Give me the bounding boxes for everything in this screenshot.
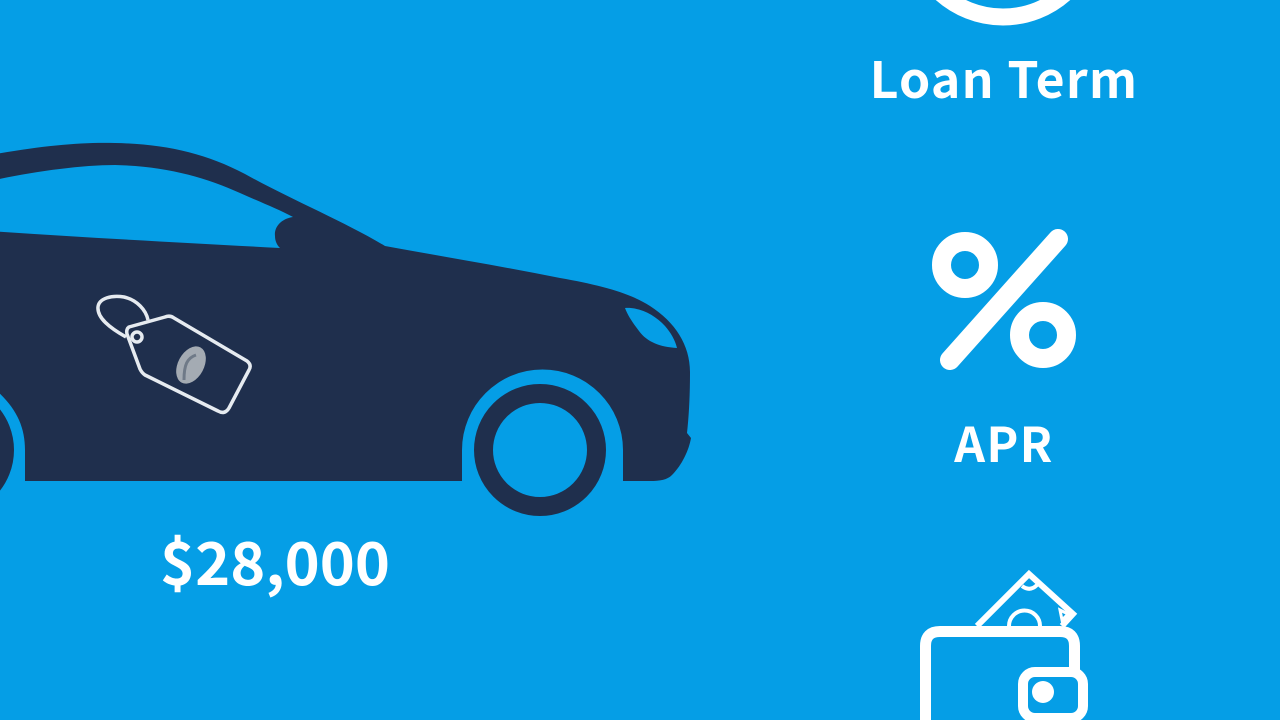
tag gray mark — [170, 341, 212, 389]
icon: percent — [942, 239, 1066, 360]
banknote — [977, 574, 1073, 626]
icon: price tag — [98, 296, 250, 412]
tag string loop — [98, 296, 148, 337]
rear wheel — [0, 394, 4, 506]
wallet body — [926, 632, 1074, 720]
clasp button — [1032, 681, 1054, 703]
label: APR: APR — [953, 406, 1054, 476]
tag outline — [127, 316, 250, 412]
car body silhouette — [0, 143, 691, 481]
tag hole — [132, 332, 142, 342]
price label: $28,000 — [160, 517, 390, 603]
label: loan term: Loan Term — [870, 41, 1138, 113]
icon: wallet — [926, 574, 1083, 720]
car illustration — [0, 143, 691, 506]
front wheel — [484, 394, 596, 506]
icon: clock (loan term) — [910, 0, 1096, 17]
wallet clasp — [1023, 672, 1083, 718]
headlight — [625, 308, 677, 348]
